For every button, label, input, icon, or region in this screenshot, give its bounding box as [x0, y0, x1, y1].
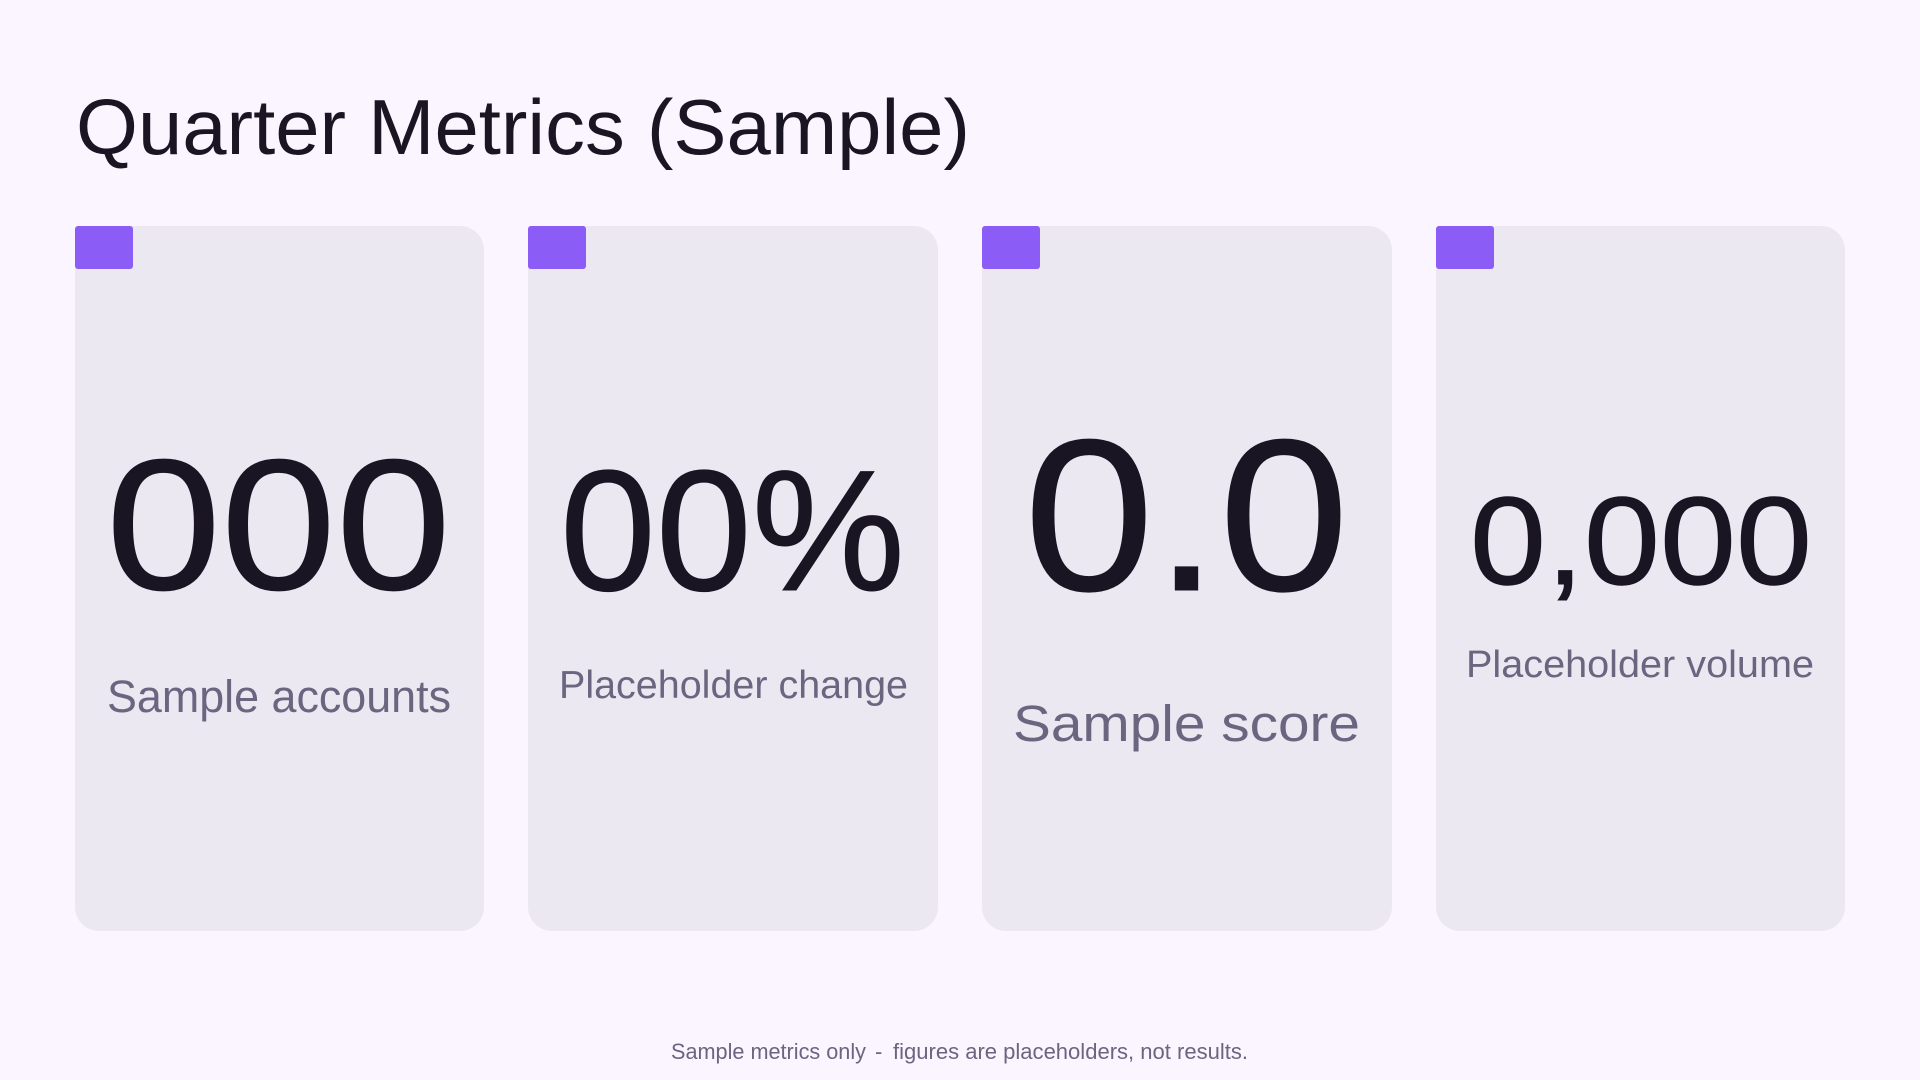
card background [75, 226, 484, 931]
footer note: figures are placeholders, not results. [893, 1039, 1248, 1064]
footer note: - [875, 1039, 882, 1064]
panel: sample score card [982, 226, 1392, 931]
footer note: Sample metrics only [671, 1039, 866, 1064]
title: Quarter Metrics (Sample) [76, 83, 970, 171]
panel: sample accounts card [75, 226, 484, 931]
metric label: sample score: Sample score [1013, 695, 1360, 752]
card background [528, 226, 938, 931]
metric label: placeholder change: Placeholder change [559, 664, 908, 707]
metric value: 000: 000 [106, 422, 451, 629]
accent tab [75, 226, 133, 269]
metric value: 00%: 00% [560, 435, 905, 627]
metric label: placeholder volume: Placeholder volume [1466, 644, 1814, 686]
accent tab [528, 226, 586, 269]
card background [982, 226, 1392, 931]
metric label: sample accounts: Sample accounts [107, 671, 451, 722]
panel: placeholder change card [528, 226, 938, 931]
accent tab [982, 226, 1040, 269]
metric value: 0.0: 0.0 [1024, 394, 1349, 636]
accent tab [1436, 226, 1494, 269]
metric value: 0,000: 0,000 [1470, 472, 1812, 611]
footer note [671, 1039, 1248, 1064]
card background [1436, 226, 1845, 931]
panel: placeholder volume card [1436, 226, 1845, 931]
